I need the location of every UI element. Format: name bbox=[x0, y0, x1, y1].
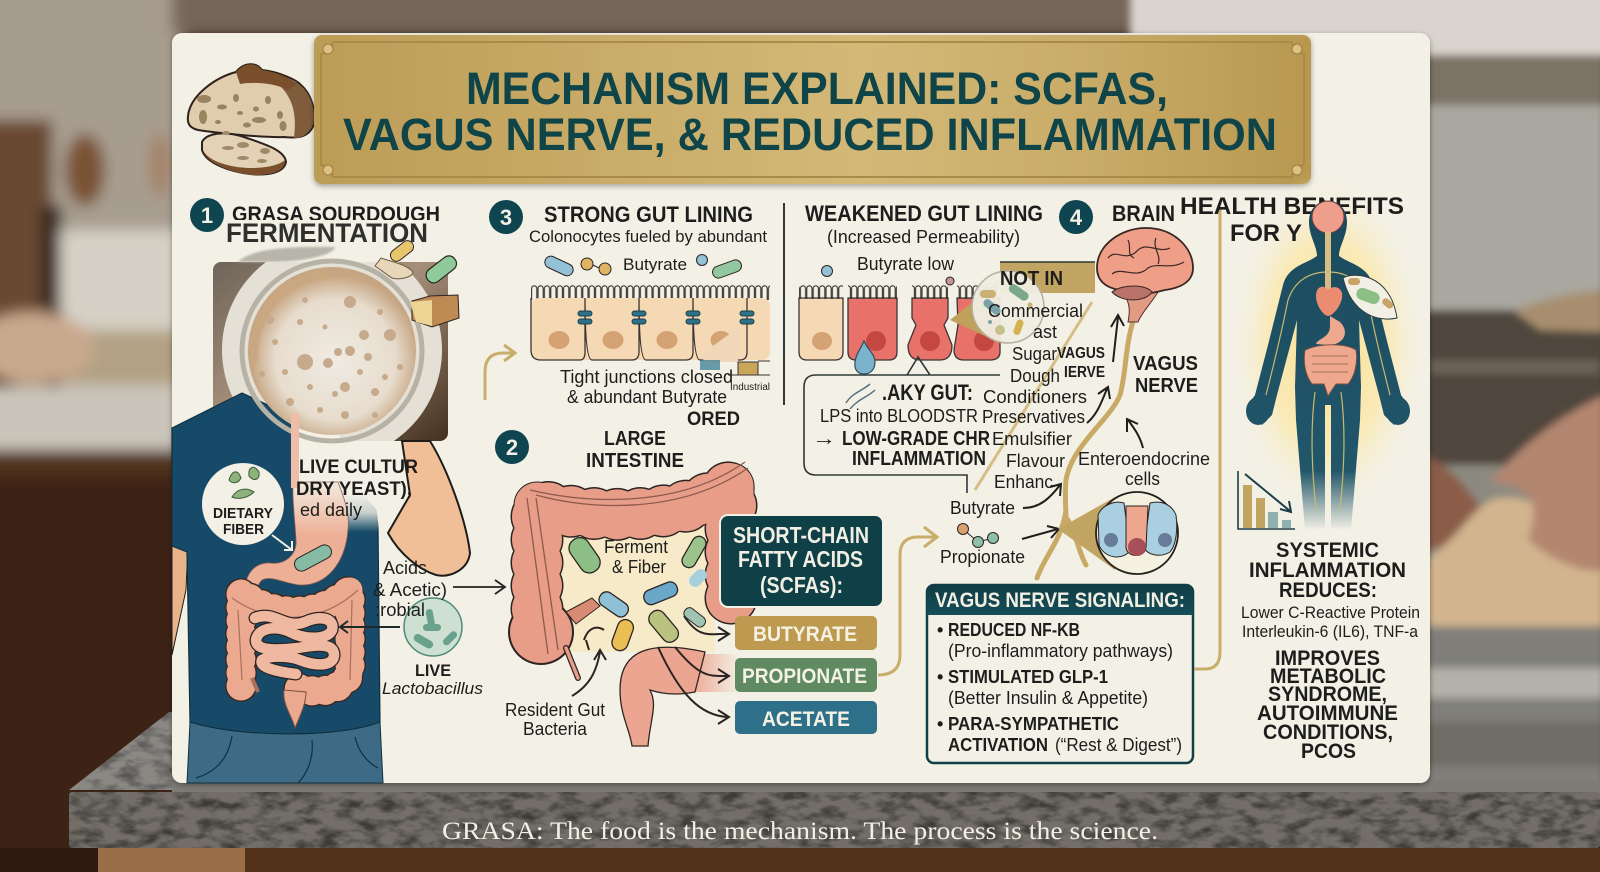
stomach bbox=[246, 482, 348, 592]
colon bbox=[241, 590, 350, 691]
bullet: parasympathetic activation: • bbox=[937, 714, 943, 734]
systemic inflammation text bbox=[1241, 539, 1420, 641]
overlaid additive list: Conditioners bbox=[983, 387, 1087, 407]
bullet: stimulated GLP-1: • bbox=[937, 667, 943, 687]
main infographic panel bbox=[172, 33, 1430, 783]
text: ferment and fiber bbox=[604, 537, 668, 577]
t-shirt bbox=[172, 393, 380, 734]
callout box: leaky gut: LPS into BLOODSTR bbox=[820, 406, 978, 426]
callout box: leaky gut: → bbox=[812, 428, 836, 450]
panel: weakened gut lining bbox=[799, 201, 1095, 493]
step 1 text: acids: :robial bbox=[375, 600, 425, 620]
step 3 caption bbox=[560, 367, 733, 407]
step 2 heading bbox=[586, 428, 684, 472]
badge 2: 2 bbox=[506, 435, 518, 460]
badge 3: 3 bbox=[500, 205, 512, 230]
small label: industrial: Industrial bbox=[730, 382, 770, 393]
icon: declining bar chart bbox=[1238, 471, 1295, 529]
panel: step 1 fermentation bbox=[172, 198, 505, 783]
arrows to SCFAs bbox=[658, 616, 729, 724]
large intestine illustration bbox=[508, 462, 748, 746]
butyrate molecules row: Butyrate bbox=[623, 255, 687, 274]
step 2 heading: LARGE bbox=[604, 428, 666, 450]
step 3 heading: STRONG GUT LINING bbox=[544, 202, 753, 227]
title banner bbox=[314, 35, 1311, 184]
bullet: parasympathetic activation: (“Rest & Digest”) bbox=[1055, 735, 1182, 755]
text: resident gut bacteria: Bacteria bbox=[523, 719, 588, 739]
improves conditions text: CONDITIONS, bbox=[1263, 721, 1393, 744]
bullet: parasympathetic activation: PARA-SYMPATHETIC bbox=[948, 714, 1119, 734]
butyrate and propionate molecules: Propionate bbox=[940, 547, 1025, 567]
text: resident gut bacteria bbox=[505, 700, 605, 739]
gold diagonal nerve bbox=[975, 302, 1092, 490]
systemic inflammation text: INFLAMMATION bbox=[1249, 559, 1406, 582]
small intestine bbox=[255, 616, 334, 674]
text: resident gut bacteria: Resident Gut bbox=[505, 700, 605, 720]
improves conditions text: IMPROVES bbox=[1275, 647, 1380, 670]
step 1 text: live cultures bbox=[296, 457, 418, 520]
systemic inflammation text: SYSTEMIC bbox=[1276, 539, 1379, 562]
panel: step 4 brain and vagus nerve bbox=[927, 200, 1210, 763]
enteroendocrine cell magnifier bbox=[1058, 492, 1178, 574]
weakened lining heading bbox=[805, 201, 1043, 274]
butyrate pill: BUTYRATE bbox=[753, 623, 857, 646]
sourdough starter in jar bbox=[242, 261, 422, 441]
butyrate and propionate molecules bbox=[940, 484, 1061, 567]
healthy gut lining cells bbox=[531, 285, 770, 375]
yellow glow behind figure bbox=[1228, 170, 1428, 520]
title text: VAGUS NERVE, & REDUCED INFLAMMATION bbox=[343, 109, 1277, 160]
propionate pill: PROPIONATE bbox=[742, 665, 867, 688]
damaged gut lining cells bbox=[799, 266, 1000, 374]
title text: MECHANISM EXPLAINED: SCFAS, bbox=[466, 63, 1168, 114]
small vagus nerve label: IERVE bbox=[1064, 364, 1105, 381]
badge 1 bbox=[190, 198, 224, 232]
health benefits heading bbox=[1180, 193, 1404, 247]
bullet: parasympathetic activation: ACTIVATION bbox=[948, 735, 1048, 755]
right arm bbox=[388, 441, 470, 576]
baker and dough background right bbox=[1130, 0, 1600, 798]
overlaid additive list: Emulsifier bbox=[992, 429, 1072, 449]
step 1 text: live cultures: LIVE CULTUR bbox=[299, 457, 418, 478]
vagus nerve signaling box: VAGUS NERVE SIGNALING: bbox=[935, 589, 1185, 612]
badge 3 bbox=[489, 200, 523, 234]
vagus nerve path bbox=[1037, 318, 1134, 578]
arrows up the vagus nerve bbox=[1087, 315, 1143, 448]
gold arrow from fermentation to gut lining bbox=[485, 345, 515, 400]
gold arrow to vagus region bbox=[878, 527, 937, 675]
step 3 heading: Colonocytes fueled by abundant bbox=[529, 227, 767, 246]
step 2 heading: INTESTINE bbox=[586, 450, 684, 472]
weakened lining heading: WEAKENED GUT LINING bbox=[805, 201, 1043, 226]
panel: step 3 strong gut lining bbox=[489, 200, 770, 430]
body figure with organs bbox=[1246, 201, 1410, 530]
small vagus nerve label: VAGUS bbox=[1057, 345, 1105, 362]
brain heading: BRAIN bbox=[1112, 201, 1175, 226]
panel: step 2 large intestine bbox=[495, 428, 937, 746]
overlaid additive list: Sugar bbox=[1012, 344, 1057, 364]
overlaid additive list: Preservatives bbox=[982, 407, 1085, 427]
enteroendocrine label: cells bbox=[1125, 469, 1160, 489]
bullet: stimulated GLP-1: (Better Insulin & Appetite) bbox=[948, 688, 1148, 708]
text: ferment and fiber: & Fiber bbox=[612, 557, 666, 577]
large vagus nerve label: NERVE bbox=[1135, 375, 1198, 397]
overlaid additive list: Dough bbox=[1010, 366, 1060, 386]
improves conditions text: SYNDROME, bbox=[1268, 683, 1387, 706]
step 3 caption: Tight junctions closed bbox=[560, 367, 733, 387]
icon: lactobacillus circle bbox=[404, 598, 462, 656]
overlaid additive list bbox=[982, 301, 1087, 492]
bullet: reduced NF-KB bbox=[937, 620, 1173, 661]
enteroendocrine label bbox=[1078, 449, 1210, 489]
not in tag with lens: NOT IN bbox=[1000, 268, 1063, 290]
jeans bbox=[187, 722, 383, 783]
large vagus nerve label: VAGUS bbox=[1133, 353, 1198, 375]
butyrate and propionate molecules: Butyrate bbox=[950, 498, 1015, 518]
step 1 heading: FERMENTATION bbox=[226, 218, 428, 248]
left arm bbox=[172, 545, 188, 655]
health benefits heading: HEALTH BENEFITS bbox=[1180, 193, 1404, 220]
SCFA heading box bbox=[720, 515, 883, 607]
not in tag with lens bbox=[950, 262, 1095, 343]
systemic inflammation text: Lower C-Reactive Protein bbox=[1241, 603, 1420, 622]
step 1 heading: GRASA SOURDOUGH bbox=[232, 203, 440, 226]
badge 1: 1 bbox=[201, 203, 213, 228]
text: ferment and fiber: Ferment bbox=[604, 537, 668, 557]
step 1 text: acids: Acids bbox=[383, 558, 427, 578]
icon: sourdough bread bbox=[188, 64, 314, 175]
systemic inflammation text: Interleukin-6 (IL6), TNF-a bbox=[1242, 622, 1419, 641]
person torso with digestive tract bbox=[172, 393, 470, 783]
bullet: stimulated GLP-1: STIMULATED GLP-1 bbox=[948, 667, 1108, 687]
improves conditions text bbox=[1257, 647, 1398, 763]
bullet: stimulated GLP-1 bbox=[937, 667, 1148, 708]
callout box: leaky gut bbox=[804, 357, 1000, 493]
SCFA heading box: (SCFAs): bbox=[760, 572, 843, 598]
esophagus bbox=[291, 413, 299, 488]
step 1 text: live cultures: DRY YEAST), bbox=[296, 479, 412, 500]
callout box: leaky gut: LOW-GRADE CHR bbox=[842, 428, 990, 450]
icon: dietary fiber badge: DIETARY bbox=[213, 505, 273, 522]
panel: health benefits bbox=[1180, 170, 1428, 763]
icon: dietary fiber badge bbox=[202, 463, 292, 550]
butyrate molecules row bbox=[543, 254, 743, 280]
step 1 text: live cultures: ed daily bbox=[300, 500, 362, 520]
step 1 text: acids bbox=[373, 558, 447, 620]
improves conditions text: AUTOIMMUNE bbox=[1257, 702, 1398, 725]
callout box: leaky gut: .AKY GUT: bbox=[882, 380, 973, 405]
step 3 heading bbox=[529, 202, 767, 246]
badge 2 bbox=[495, 430, 529, 464]
icon: floating grain and bacteria bbox=[375, 238, 459, 327]
overlaid additive list: ast bbox=[1033, 322, 1057, 342]
gold connector to health benefits bbox=[1194, 209, 1220, 669]
health benefits heading: FOR Y bbox=[1230, 220, 1302, 247]
icon: dietary fiber badge: FIBER bbox=[223, 521, 264, 538]
bullet: reduced NF-KB: REDUCED NF-KB bbox=[948, 620, 1080, 640]
label: live lactobacillus bbox=[382, 661, 484, 698]
title text bbox=[343, 63, 1277, 160]
step 1 heading bbox=[226, 203, 440, 248]
improves conditions text: METABOLIC bbox=[1270, 665, 1386, 688]
step 3 caption: & abundant Butyrate bbox=[567, 387, 727, 407]
SCFA heading box: SHORT-CHAIN bbox=[733, 522, 869, 548]
improves conditions text: PCOS bbox=[1301, 740, 1356, 763]
bullet: reduced NF-KB: (Pro-inflammatory pathways) bbox=[948, 641, 1173, 661]
systemic inflammation text: REDUCES: bbox=[1279, 579, 1377, 602]
SCFA heading box: FATTY ACIDS bbox=[738, 546, 863, 572]
vagus nerve signaling box bbox=[927, 585, 1193, 763]
blurred kitchen background left bbox=[0, 0, 1152, 872]
overlaid additive list: Flavour bbox=[1006, 451, 1065, 471]
large vagus nerve label bbox=[1133, 353, 1198, 397]
callout box: leaky gut: INFLAMMATION bbox=[852, 448, 986, 470]
fragment: ored: ORED bbox=[687, 409, 740, 430]
starter photo backdrop bbox=[213, 246, 448, 441]
badge 4: 4 bbox=[1070, 205, 1083, 230]
step 1 text: acids: & Acetic) bbox=[373, 580, 447, 600]
icon: brain bbox=[1097, 228, 1193, 322]
granite counter bbox=[0, 712, 1600, 872]
bullet: parasympathetic activation bbox=[937, 714, 1182, 755]
overlaid additive list: Enhanc bbox=[994, 472, 1053, 492]
arrow: resident bacteria bbox=[572, 628, 606, 696]
label: live lactobacillus: Lactobacillus bbox=[382, 679, 484, 698]
butyrate pill bbox=[735, 616, 877, 650]
caption: GRASA: The food is the mechanism. The process is the science. bbox=[442, 818, 1158, 845]
acetate pill bbox=[735, 701, 877, 734]
weakened lining heading: Butyrate low bbox=[857, 254, 955, 274]
divider between lining states bbox=[783, 203, 785, 405]
arrow: lactobacillus to intestine bbox=[340, 621, 400, 633]
acetate pill: ACETATE bbox=[762, 708, 850, 731]
gut bacteria bbox=[565, 534, 709, 653]
arrow to large intestine bbox=[453, 580, 505, 594]
fade over shirt bbox=[296, 425, 420, 495]
badge 4 bbox=[1059, 200, 1093, 234]
propionate pill bbox=[735, 658, 877, 692]
small vagus nerve label bbox=[1057, 345, 1105, 381]
overlaid additive list: Commercial bbox=[988, 301, 1083, 321]
weakened lining heading: (Increased Permeability) bbox=[827, 227, 1020, 247]
bullet: reduced NF-KB: • bbox=[937, 620, 943, 640]
label: live lactobacillus: LIVE bbox=[415, 661, 451, 680]
enteroendocrine label: Enteroendocrine bbox=[1078, 449, 1210, 469]
